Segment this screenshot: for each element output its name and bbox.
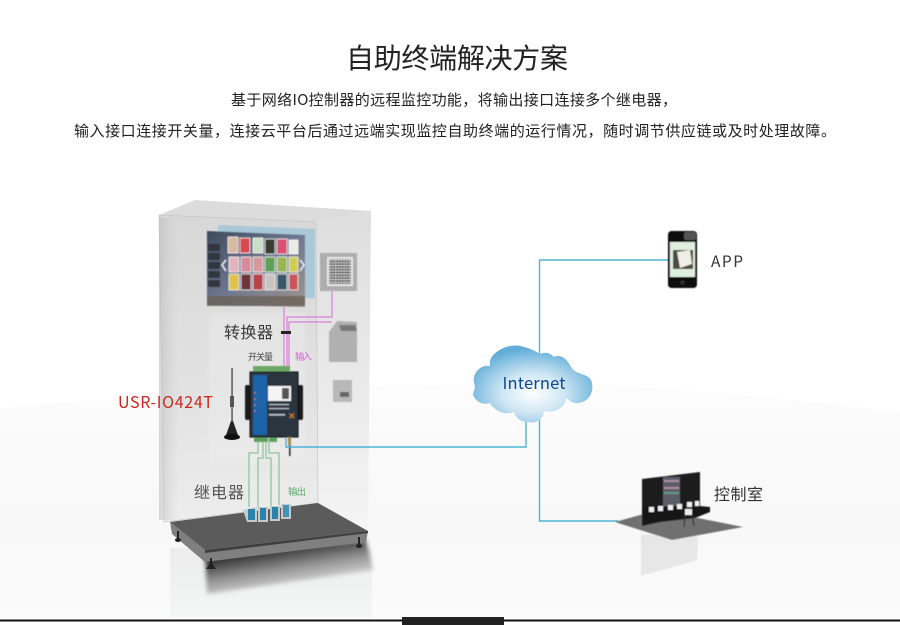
kiosk reflection [170, 540, 373, 617]
control room [615, 472, 743, 576]
screen bottom bar [207, 296, 305, 306]
label: model name: USR-IO424T [118, 389, 213, 413]
relay 2 [258, 507, 268, 522]
cabinet front face [159, 215, 318, 522]
relay 4 [281, 504, 291, 519]
label: converter: 转换器 [224, 319, 273, 343]
screen back glow [218, 225, 315, 298]
output wires [249, 442, 279, 507]
top terminals [253, 366, 290, 372]
display panel [663, 477, 680, 507]
label: output: 输出 [288, 484, 306, 498]
intro text: 输入接口连接开关量，连接云平台后通过远端实现监控自助终端的运行情况，随时调节供应链或及时处理故障。 [74, 120, 836, 141]
speaker grille [320, 253, 357, 291]
cloud label: Internet [502, 370, 566, 394]
kiosk base platform [170, 503, 368, 569]
device logo: ✕ [288, 409, 296, 422]
intro text: 基于网络IO控制器的远程监控功能，将输出接口连接多个继电器， [231, 89, 677, 110]
intro text [74, 89, 836, 141]
input wires [284, 291, 332, 368]
qr label [268, 386, 291, 401]
label: relay: 继电器 [194, 479, 244, 503]
bottom terminals [254, 437, 277, 442]
product grid [228, 237, 298, 290]
feet [175, 531, 362, 569]
phone icon [668, 231, 697, 288]
label: app: APP [711, 250, 743, 272]
kiosk cabinet [159, 200, 371, 530]
card reader [333, 380, 352, 402]
indicator leds [254, 392, 256, 412]
line: cloud to app [540, 260, 668, 355]
relay 1 [243, 507, 257, 522]
device body [250, 372, 298, 437]
console desk [642, 505, 710, 526]
line: device to cloud [286, 415, 526, 447]
connector [288, 437, 291, 445]
label: input: 输入 [295, 349, 312, 363]
wire clip [281, 331, 291, 334]
label: control room: 控制室 [714, 481, 763, 505]
cabinet top face [159, 200, 371, 222]
line: cloud to control room [540, 415, 618, 521]
inner white panel [209, 313, 305, 463]
ticket slot [329, 321, 357, 362]
network lines [286, 260, 668, 521]
room wall [642, 472, 700, 526]
bottom rule [0, 617, 900, 625]
room reflection [641, 533, 698, 576]
operator [684, 509, 694, 527]
title: 自助终端解决方案 [346, 37, 568, 77]
blue strip [253, 375, 267, 435]
antenna [224, 368, 240, 440]
room floor [615, 510, 743, 540]
label: switch input: 开关量 [248, 350, 273, 363]
relays [243, 504, 291, 522]
internet cloud [473, 345, 592, 422]
screen side menu [208, 244, 220, 287]
touch screen [207, 225, 315, 307]
mounting ears [245, 385, 303, 420]
screen arrows [222, 260, 304, 271]
relay 3 [270, 506, 280, 521]
platform side [170, 522, 368, 562]
platform top [170, 503, 368, 550]
screen [207, 231, 305, 307]
IO controller device [245, 366, 303, 456]
device text lines [269, 404, 289, 416]
monitors [649, 501, 699, 512]
cabinet right side [316, 211, 371, 530]
